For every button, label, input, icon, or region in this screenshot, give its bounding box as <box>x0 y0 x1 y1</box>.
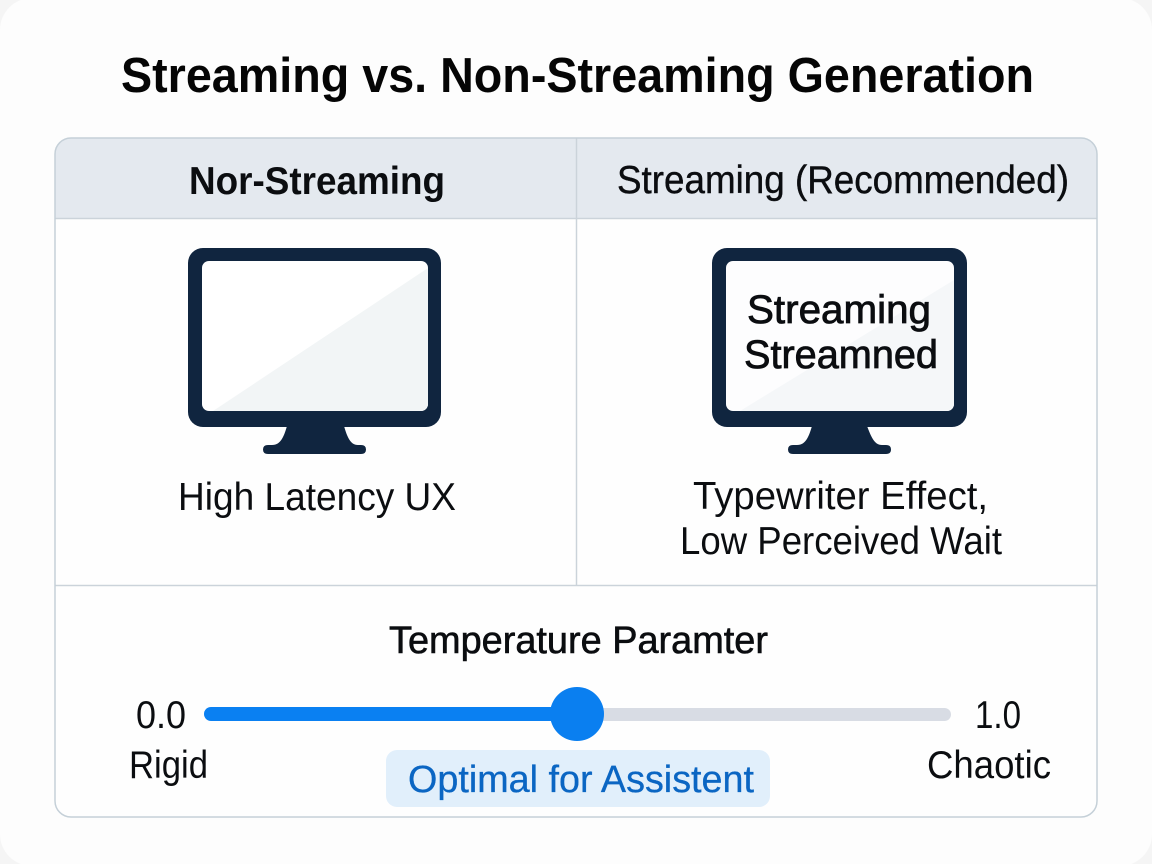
caption: typewriter effect <box>680 475 1002 563</box>
high value: 1.0 <box>975 694 1021 737</box>
caption: high latency: High Latency UX <box>178 476 456 519</box>
low label: Rigid <box>129 744 208 787</box>
slider fill <box>204 707 576 721</box>
slider track <box>560 708 951 721</box>
caption: typewriter effect: Low Perceived Wait <box>680 520 1002 563</box>
icon: blank monitor <box>188 248 441 454</box>
caption: typewriter effect: Typewriter Effect, <box>693 475 988 518</box>
slider knob <box>550 687 604 741</box>
slider heading: Temperature Paramter <box>389 620 768 662</box>
table background <box>55 138 1097 817</box>
title: Streaming vs. Non-Streaming Generation <box>121 49 1034 103</box>
heading: streaming: Streaming (Recommended) <box>617 159 1069 202</box>
table border <box>55 138 1097 817</box>
low value: 0.0 <box>136 694 186 737</box>
table header band <box>55 138 1097 218</box>
panel: temperature parameter <box>129 620 1051 807</box>
callout: optimal: Optimal for Assistent <box>408 759 754 801</box>
monitor text line 2: Streamned <box>744 333 938 377</box>
high label: Chaotic <box>927 744 1051 787</box>
panel: comparison table <box>55 138 1097 817</box>
monitor text: Streaming <box>747 288 931 332</box>
callout: optimal <box>386 750 770 807</box>
heading: non-streaming: Nor-Streaming <box>189 160 445 203</box>
icon: streaming monitor <box>712 248 967 454</box>
